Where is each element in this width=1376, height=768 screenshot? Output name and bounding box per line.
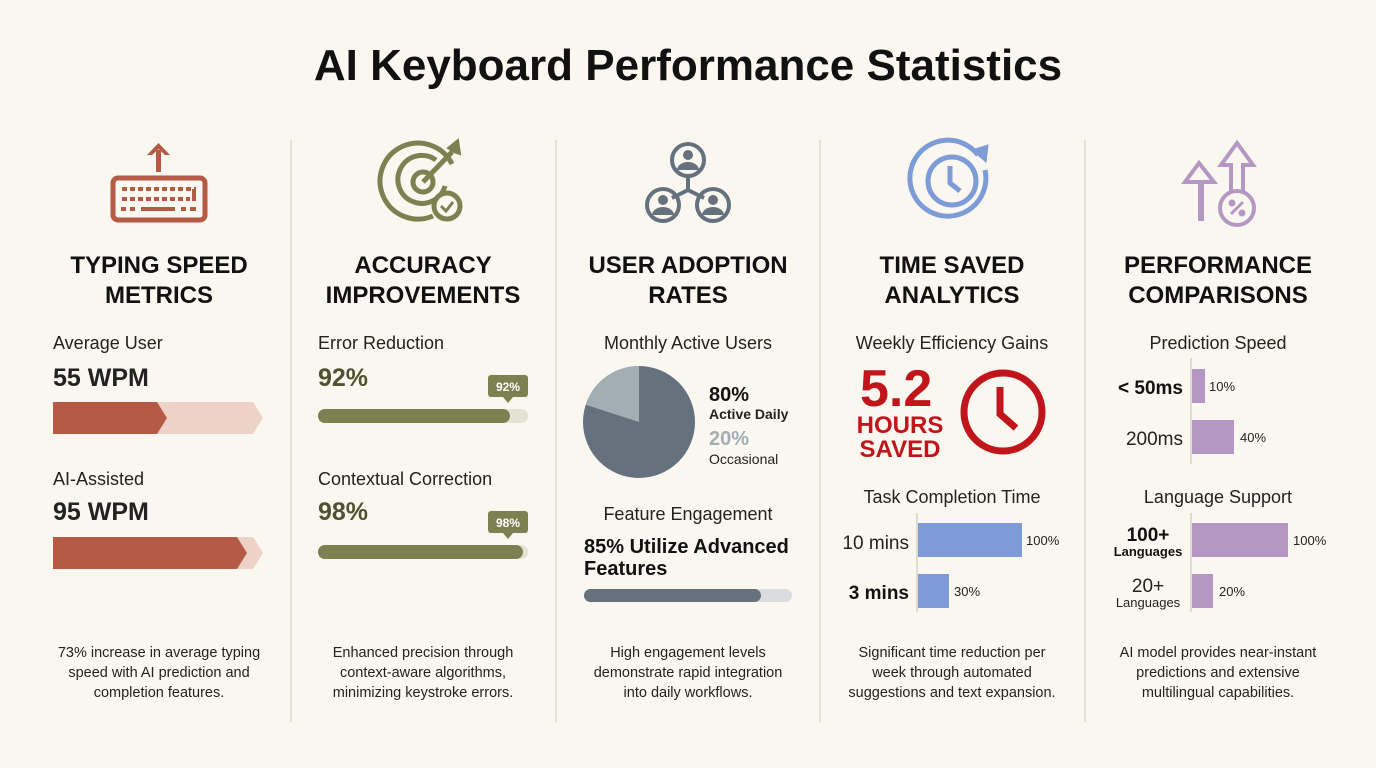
icon: red clock — [964, 373, 1042, 451]
heading: TIME SAVED — [880, 252, 1024, 279]
bar chart: languages: 100+ — [1127, 525, 1169, 546]
footer text: High engagement levels — [610, 645, 766, 661]
bar chart: languages: Languages — [1114, 544, 1182, 559]
panel: typing speed: METRICS — [105, 282, 213, 309]
panel: accuracy: Error Reduction — [318, 333, 444, 353]
panel: user adoption: Features — [584, 558, 667, 580]
footer text: suggestions and text expansion. — [848, 685, 1056, 701]
panel: time saved: ANALYTICS — [884, 282, 1020, 309]
bar chart: prediction speed: < 50ms — [1118, 378, 1183, 399]
footer text: speed with AI prediction and — [68, 665, 250, 681]
heading: PERFORMANCE — [1124, 252, 1312, 279]
panel: typing speed: Average User — [53, 333, 163, 353]
bar chart: prediction speed: 40% — [1240, 430, 1266, 445]
bar: error reduction: 92% — [496, 380, 520, 394]
bar: error reduction — [318, 375, 528, 423]
bar: contextual — [318, 511, 528, 559]
bar chart: languages: 20+ — [1132, 576, 1164, 597]
pie chart — [583, 366, 695, 478]
panel: user adoption: RATES — [648, 282, 728, 309]
panel: typing speed: AI-Assisted — [53, 469, 144, 489]
heading: TYPING SPEED — [70, 252, 248, 279]
panel: user adoption — [583, 144, 792, 701]
big stat: SAVED — [860, 436, 940, 463]
bar chart: prediction speed — [1118, 358, 1266, 464]
footer text: minimizing keystroke errors. — [333, 685, 513, 701]
panel: time saved: Task Completion Time — [863, 487, 1041, 507]
bar chart: prediction speed: 200ms — [1126, 429, 1183, 450]
panel: accuracy: 98% — [318, 498, 368, 526]
bar: average — [53, 402, 263, 434]
panel: performance: Prediction Speed — [1149, 333, 1287, 353]
icon: clock refresh — [910, 140, 988, 216]
icon: people network — [647, 144, 729, 221]
heading: USER ADOPTION — [588, 252, 788, 279]
bar chart: languages: 100% — [1293, 533, 1327, 548]
footer text: predictions and extensive — [1136, 665, 1300, 681]
panel: user adoption: Monthly Active Users — [604, 333, 772, 353]
heading: ACCURACY — [354, 252, 492, 279]
footer text: week through automated — [871, 665, 1032, 681]
panel: performance: COMPARISONS — [1128, 282, 1308, 309]
pie legend: 20% — [709, 428, 749, 450]
big stat — [857, 360, 943, 463]
panel: accuracy — [318, 140, 528, 701]
footer text: completion features. — [94, 685, 224, 701]
bar chart: task time: 10 mins — [842, 533, 909, 554]
panel: performance — [1114, 143, 1327, 701]
footer text: Significant time reduction per — [858, 645, 1046, 661]
big stat: HOURS — [857, 412, 943, 439]
footer text: Enhanced precision through — [333, 645, 513, 661]
title: AI Keyboard Performance Statistics — [314, 41, 1062, 90]
footer text: multilingual capabilities. — [1142, 685, 1294, 701]
bar chart: task time: 30% — [954, 584, 980, 599]
pie legend: Occasional — [709, 451, 778, 467]
panel: typing speed: 95 WPM — [53, 498, 149, 526]
panel: accuracy: Contextual Correction — [318, 469, 492, 489]
bar chart: prediction speed: 10% — [1209, 379, 1235, 394]
pie legend: 80% — [709, 384, 749, 406]
panel: time saved: Weekly Efficiency Gains — [856, 333, 1048, 353]
panel: user adoption: Feature Engagement — [603, 504, 773, 524]
pie legend — [709, 384, 789, 467]
footer text: into daily workflows. — [624, 685, 752, 701]
icon: target — [380, 140, 460, 219]
icon: keyboard — [113, 143, 205, 220]
footer text: 73% increase in average typing — [58, 645, 260, 661]
bar chart: languages — [1114, 513, 1327, 612]
bar chart: languages: Languages — [1116, 595, 1181, 610]
big stat: 5.2 — [860, 360, 932, 418]
bar: engagement — [584, 589, 792, 602]
icon: arrows percent — [1185, 143, 1254, 225]
bar: ai-assisted — [53, 537, 263, 569]
bar: contextual: 98% — [496, 516, 520, 530]
bar chart: task time: 3 mins — [849, 583, 909, 604]
panel: performance: Language Support — [1144, 487, 1292, 507]
panel: user adoption: 85% Utilize Advanced — [584, 536, 789, 558]
bar chart: languages: 20% — [1219, 584, 1245, 599]
bar chart: task time: 100% — [1026, 533, 1060, 548]
footer text: AI model provides near-instant — [1120, 645, 1316, 661]
footer text: context-aware algorithms, — [340, 665, 506, 681]
panel: accuracy: 92% — [318, 364, 368, 392]
panel: time saved — [842, 140, 1060, 701]
panel: typing speed: 55 WPM — [53, 364, 149, 392]
panel: typing speed — [53, 143, 263, 701]
panel: accuracy: IMPROVEMENTS — [326, 282, 520, 309]
footer text: demonstrate rapid integration — [594, 665, 782, 681]
pie legend: Active Daily — [709, 406, 789, 422]
bar chart: task time — [842, 513, 1060, 612]
